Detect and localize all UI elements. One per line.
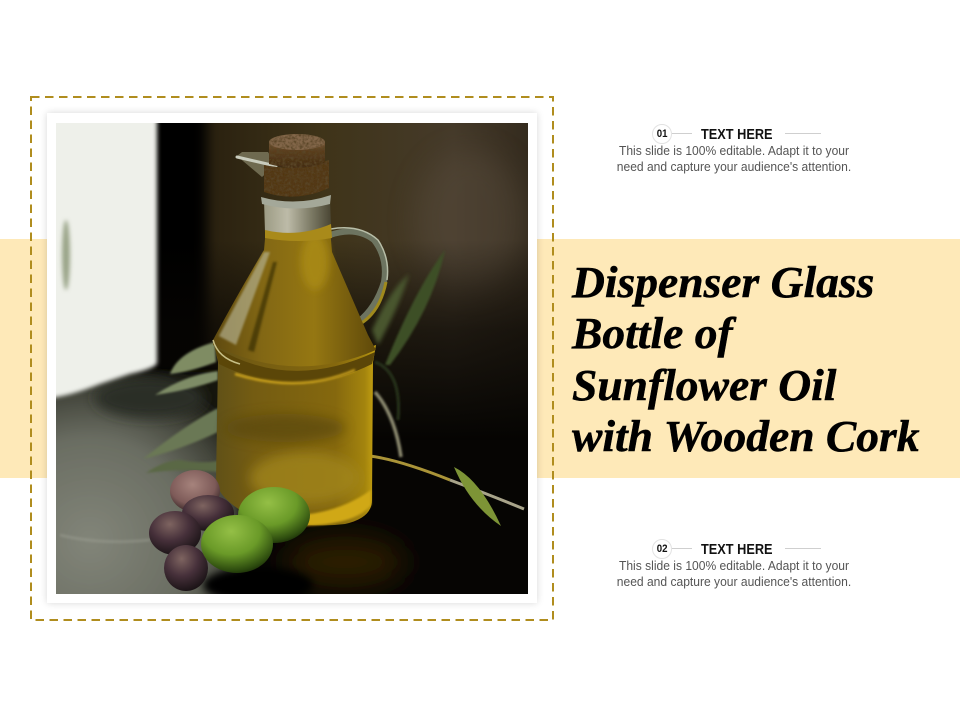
number badge 02: 02 bbox=[657, 543, 667, 555]
cork bbox=[264, 134, 329, 197]
bottle bbox=[213, 134, 388, 526]
number badge 01: 01 bbox=[657, 128, 667, 140]
rim band bbox=[215, 347, 375, 383]
handle bbox=[330, 231, 385, 322]
glass reflections bbox=[219, 252, 270, 345]
callout heading: TEXT HERE bbox=[701, 126, 773, 143]
neck bbox=[264, 203, 331, 233]
callout heading: TEXT HERE bbox=[701, 541, 773, 558]
title bbox=[571, 258, 920, 461]
callout body bbox=[617, 143, 851, 174]
lower body bbox=[213, 340, 376, 525]
photo: glass bottle of oil with cork and olives bbox=[56, 123, 528, 594]
callout body: This slide is 100% editable. Adapt it to your bbox=[619, 143, 849, 158]
number badge 01 bbox=[652, 124, 672, 144]
callout 02 bbox=[617, 539, 851, 589]
warm table glow bbox=[285, 536, 405, 588]
spout bbox=[238, 152, 269, 177]
photo card bbox=[47, 113, 537, 603]
callout body: need and capture your audience's attention. bbox=[617, 574, 851, 589]
title: Bottle of bbox=[572, 309, 733, 358]
leaves and branch bbox=[143, 250, 524, 526]
table surface bbox=[56, 370, 239, 594]
dark shadow beside window bbox=[160, 123, 210, 350]
wall bbox=[132, 123, 528, 428]
shoulder bbox=[213, 228, 376, 366]
callout body: need and capture your audience's attention. bbox=[617, 159, 851, 174]
title: Dispenser Glass bbox=[572, 258, 874, 307]
bottom base glow bbox=[300, 490, 371, 526]
title: with Wooden Cork bbox=[572, 412, 920, 461]
number badge 02 bbox=[652, 539, 672, 559]
yellow band bbox=[0, 239, 960, 478]
callout 01 bbox=[617, 124, 851, 174]
wall fading to black toward the table bbox=[206, 256, 528, 440]
callout body bbox=[617, 558, 851, 589]
title: Sunflower Oil bbox=[572, 361, 836, 410]
oil tone bands bbox=[250, 452, 360, 504]
window light bbox=[50, 115, 157, 398]
olives bbox=[149, 470, 313, 603]
callout body: This slide is 100% editable. Adapt it to your bbox=[619, 558, 849, 573]
